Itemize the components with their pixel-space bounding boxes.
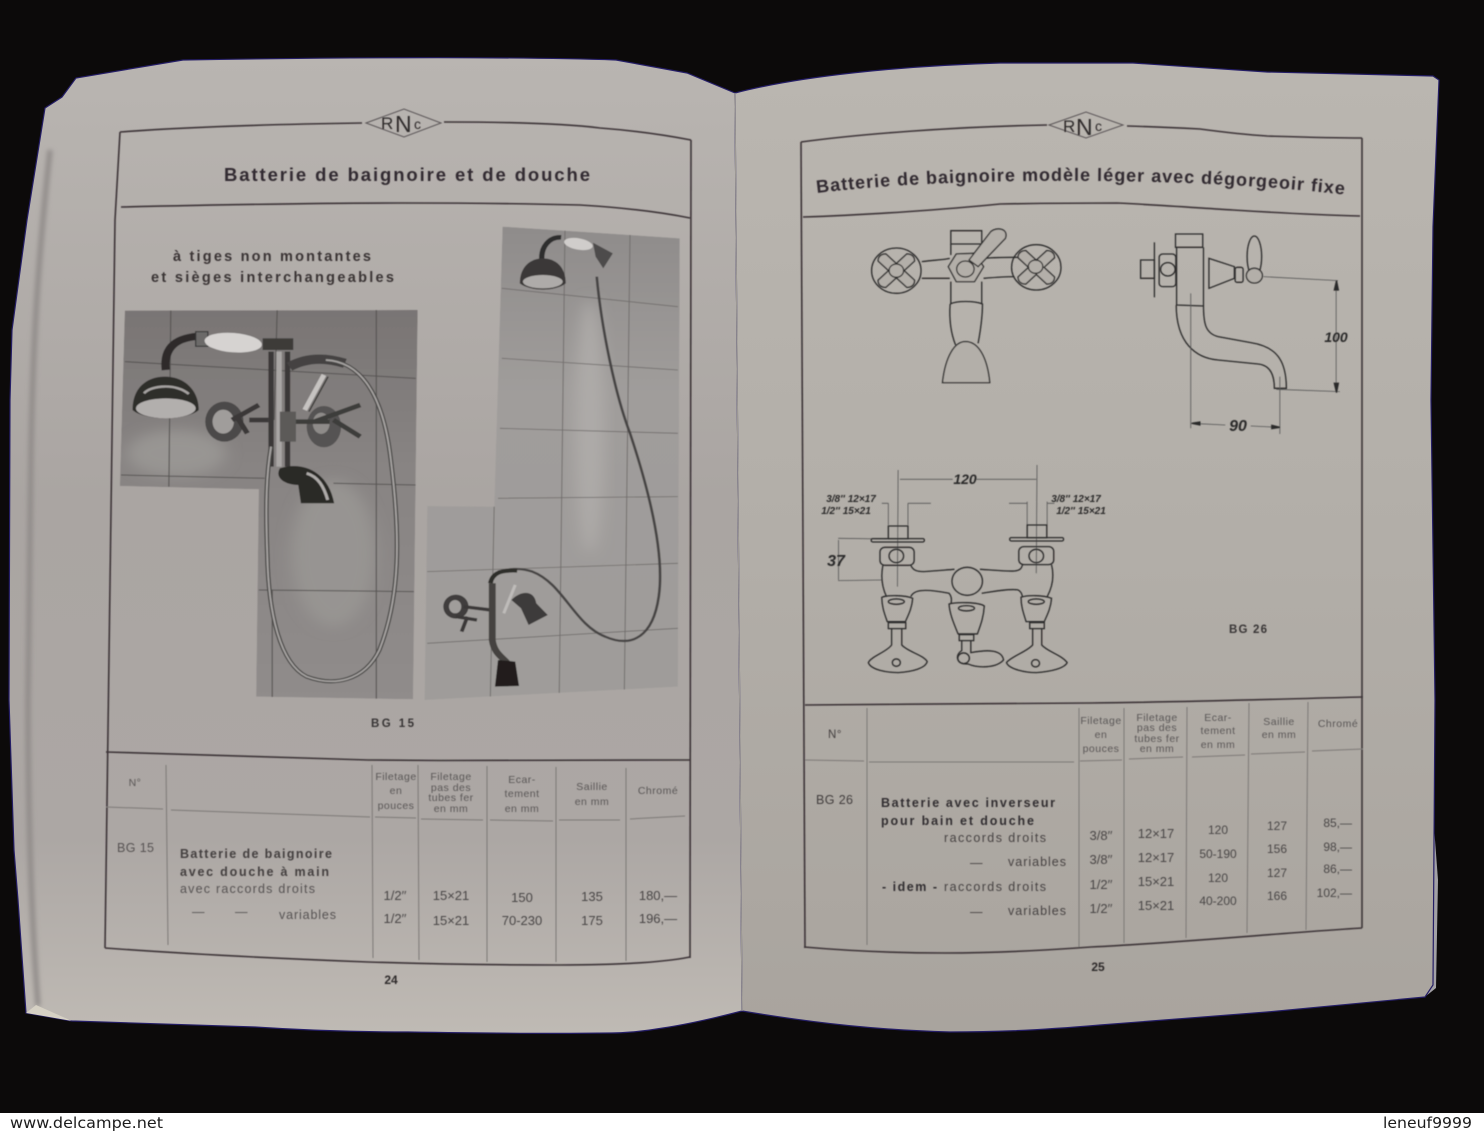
column head: filetage mm: Filetage [1136, 712, 1178, 724]
values: 180,— [639, 888, 677, 903]
watermark strip: www.delcampe.net [10, 1114, 163, 1132]
description [180, 847, 336, 922]
description: avec raccords droits [180, 882, 315, 896]
column head: filetage pouces: pouces [378, 800, 414, 812]
column head: ecartement: Ecar- [508, 774, 536, 786]
description: Batterie de baignoire [180, 847, 332, 861]
hand shower [520, 236, 613, 290]
reference label BG 26: BG 26 [1229, 624, 1267, 636]
title right: Batterie de baignoire modèle léger avec dégorgeoir fixe [816, 166, 1345, 195]
values: 156 [1267, 842, 1287, 856]
column head: filetage mm: en mm [1140, 743, 1174, 755]
column head: saillie [575, 781, 609, 808]
column head: chrome: Chromé [1318, 718, 1358, 730]
subtitle: à tiges non montantes [173, 249, 371, 265]
description: — [235, 905, 248, 919]
values: 3/8′′ [1090, 828, 1113, 843]
subtitle [151, 249, 394, 286]
left page frame [105, 122, 691, 965]
column head: filetage pouces: Filetage [1080, 715, 1122, 727]
column head: ecartement [504, 774, 540, 815]
values: 135 [581, 889, 603, 904]
dimension labels: 1/2′′ 15×21 [821, 506, 871, 517]
page number 24: 24 [384, 973, 398, 987]
column head: filetage pouces: pouces [1083, 743, 1119, 755]
column head: saillie [1262, 716, 1296, 741]
column head: filetage mm: tubes fer [1134, 733, 1180, 745]
logo left: N [395, 111, 412, 137]
column head: saillie: en mm [575, 796, 609, 808]
logo right [1049, 112, 1123, 140]
logo right: N [1076, 114, 1093, 140]
column head: filetage mm: en mm [434, 803, 468, 815]
values: 1/2′′ [384, 888, 407, 903]
column head: filetage pouces: en [390, 785, 402, 797]
column head: filetage mm: pas des [431, 782, 471, 794]
values: 127 [1267, 866, 1287, 880]
column head: chrome: Chromé [638, 785, 678, 797]
faucet body [205, 338, 360, 503]
values: 166 [1267, 889, 1287, 903]
description: — [192, 905, 205, 919]
dimension labels: 100 [1324, 329, 1348, 345]
description: pour bain et douche [881, 814, 1034, 828]
row label: BG 26 [816, 793, 853, 807]
values: 86,— [1323, 862, 1352, 876]
table right [805, 702, 1363, 947]
column head: saillie: Saillie [576, 781, 608, 793]
values: 12×17 [1138, 826, 1174, 841]
watermark strip: leneuf9999 [1383, 1114, 1472, 1132]
logo left: c [414, 116, 421, 132]
column head: filetage mm: tubes fer [428, 792, 474, 804]
description: variables [1008, 855, 1066, 869]
right page frame [801, 125, 1363, 953]
column head: saillie: Saillie [1263, 716, 1295, 728]
description: raccords droits [944, 831, 1046, 845]
table left: N° [129, 777, 141, 789]
column head: ecartement: en mm [505, 803, 539, 815]
hose [498, 277, 660, 641]
title left: Batterie de baignoire et de douche [224, 164, 590, 185]
values: 102,— [1317, 886, 1352, 900]
values: 3/8′′ [1090, 852, 1113, 867]
values: 15×21 [433, 913, 469, 928]
description: raccords droits [944, 880, 1046, 894]
row label: BG 15 [117, 841, 154, 855]
values: 15×21 [1138, 898, 1174, 913]
dimension labels: 120 [953, 471, 977, 487]
hose [266, 360, 397, 681]
column head: filetage pouces: en [1095, 729, 1107, 741]
description: variables [279, 908, 336, 922]
subtitle: et sièges interchangeables [151, 270, 394, 286]
description: - idem - [882, 880, 937, 894]
values: 1/2′′ [384, 911, 407, 926]
page number 25: 25 [1091, 960, 1105, 974]
logo left [366, 109, 441, 137]
values: 175 [581, 913, 603, 928]
values: 15×21 [433, 888, 469, 903]
column head: ecartement: en mm [1201, 739, 1235, 751]
column head: ecartement [1200, 712, 1236, 751]
column head: filetage mm: pas des [1137, 722, 1177, 734]
values: 1/2′′ [1090, 901, 1113, 916]
values: 85,— [1323, 816, 1352, 830]
drawing: front view [864, 229, 1069, 383]
column head: ecartement: Ecar- [1204, 712, 1232, 724]
technical drawings [821, 229, 1348, 673]
reference label BG 15: BG 15 [371, 718, 415, 730]
values: 70-230 [502, 913, 542, 928]
dimension labels: 3/8′′ 12×17 [826, 494, 876, 505]
column head: filetage pouces [1080, 715, 1122, 755]
dimension labels: 3/8′′ 12×17 [1051, 494, 1101, 505]
values: 196,— [639, 911, 677, 926]
values: 40-200 [1199, 894, 1237, 908]
column head: ecartement: tement [504, 788, 540, 800]
page crease left [28, 150, 50, 1006]
column head: filetage mm: Filetage [430, 771, 472, 783]
values [384, 888, 677, 928]
photo: full shower set [425, 227, 680, 700]
dimension labels: 90 [1229, 418, 1247, 435]
values [1090, 816, 1352, 916]
drawing: top view with dimensions [838, 465, 1067, 673]
table left [106, 765, 685, 962]
table right: N° [828, 729, 842, 741]
bottom lip of stack [26, 1005, 72, 1021]
column head: filetage mm [1134, 712, 1180, 755]
drawing: side view with dimensions [1141, 234, 1340, 434]
values: 150 [511, 890, 533, 905]
shower head [133, 331, 263, 418]
values: 1/2′′ [1090, 877, 1113, 892]
column head: ecartement: tement [1200, 725, 1236, 737]
values: 98,— [1323, 840, 1352, 854]
description: Batterie avec inverseur [881, 796, 1055, 810]
values: 120 [1208, 871, 1228, 885]
logo right: R [1063, 117, 1075, 136]
column head: filetage mm [428, 771, 474, 815]
left page surface [9, 58, 742, 1033]
column head: filetage pouces [375, 771, 417, 812]
values: 120 [1208, 823, 1228, 837]
description: — [970, 856, 983, 870]
photo: bath faucet close-up [120, 310, 418, 700]
dimension labels [821, 329, 1348, 570]
logo right: c [1095, 118, 1102, 134]
column head: filetage pouces: Filetage [375, 771, 417, 783]
description: variables [1008, 904, 1066, 918]
dimension labels: 37 [827, 553, 846, 570]
column head: saillie: en mm [1262, 729, 1296, 741]
values: 15×21 [1138, 874, 1174, 889]
values: 12×17 [1138, 850, 1174, 865]
dimension labels: 1/2′′ 15×21 [1056, 506, 1106, 517]
logo left: R [381, 114, 393, 133]
values: 127 [1267, 819, 1287, 833]
description: — [970, 905, 983, 919]
description [881, 796, 1066, 919]
values: 50-190 [1199, 847, 1237, 861]
page stack right edge [1426, 800, 1438, 996]
gutter [735, 93, 742, 1011]
watermark strip [0, 1113, 1484, 1132]
right page surface [735, 63, 1439, 1032]
description: avec douche à main [180, 865, 329, 879]
wall faucet [443, 571, 548, 687]
